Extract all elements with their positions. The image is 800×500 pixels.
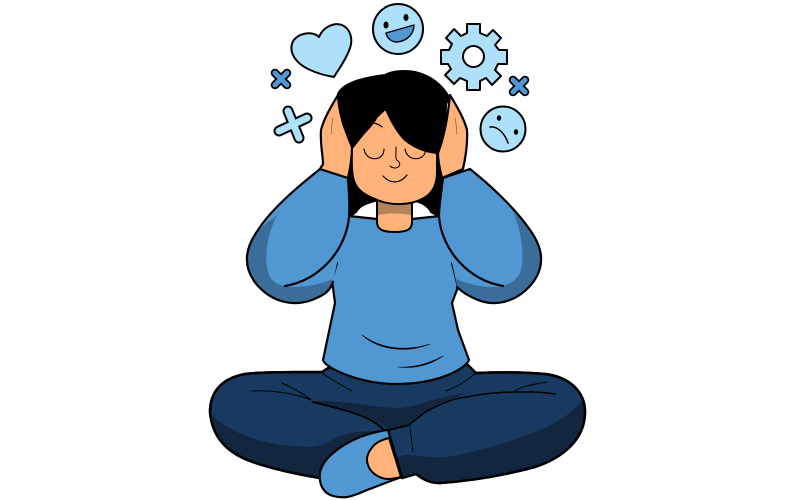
right sleeve	[439, 169, 541, 303]
left hand	[320, 95, 352, 178]
legs	[210, 365, 585, 483]
left eye	[364, 149, 384, 159]
sweater folds	[362, 335, 430, 349]
head	[338, 71, 449, 204]
icon: small cross right	[513, 80, 525, 92]
right hand	[438, 95, 467, 178]
icon: gear	[441, 24, 507, 90]
shadow: right leg	[397, 400, 584, 482]
shadow: crotch	[315, 393, 470, 430]
icon: large cross	[279, 111, 307, 138]
shadow: left leg	[212, 415, 378, 477]
icon: small cross left	[275, 73, 287, 85]
foot with slipper	[320, 430, 402, 497]
sweater torso	[323, 216, 469, 384]
eyebrow	[374, 123, 382, 127]
outline: right knee fold	[410, 392, 555, 424]
nose	[390, 147, 400, 168]
smile	[383, 175, 407, 182]
ankle cuff	[388, 425, 416, 478]
outline: leg edge	[210, 372, 585, 483]
icon: happy face	[373, 4, 423, 54]
hair front	[338, 71, 449, 153]
icon: sad face	[480, 106, 526, 152]
neck	[377, 195, 412, 232]
face	[352, 100, 437, 204]
left sleeve	[247, 169, 349, 303]
hair behind head	[340, 72, 446, 217]
outline: left knee fold	[313, 402, 384, 430]
icon: heart	[291, 24, 351, 77]
right eye	[405, 149, 426, 159]
